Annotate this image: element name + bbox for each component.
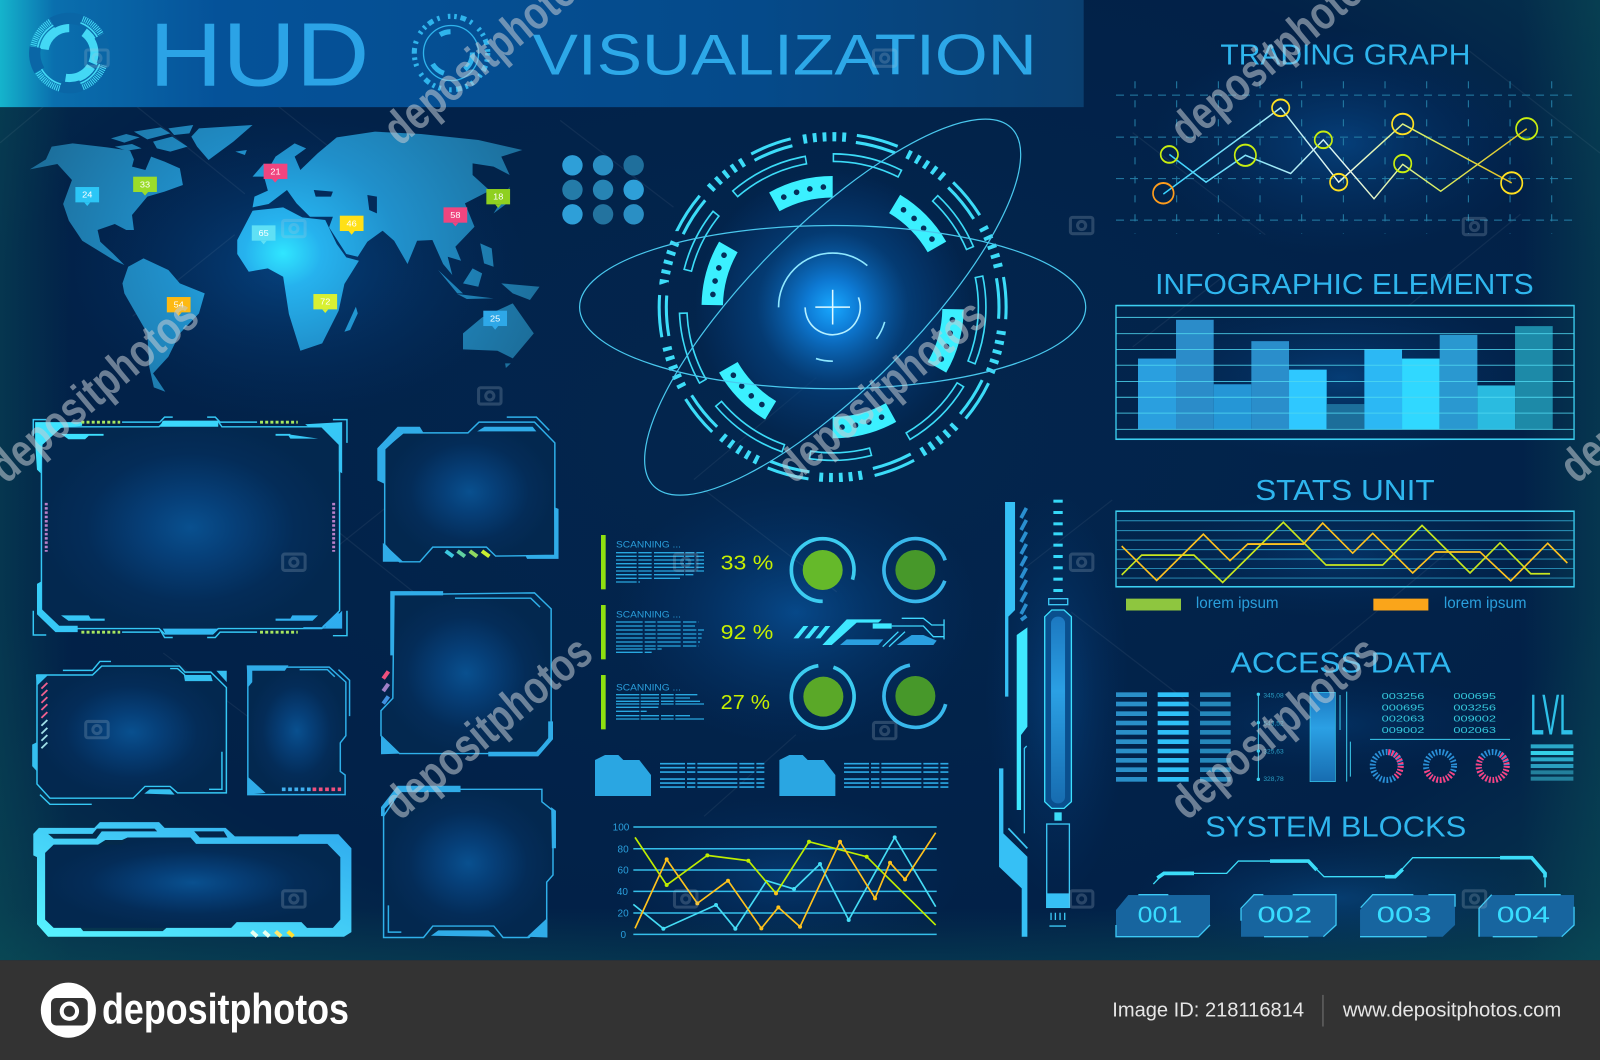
vertical scale: 328,78: [1263, 776, 1284, 783]
value: 33%: 33 %: [721, 552, 774, 574]
vertical scale: 325,63: [1263, 748, 1284, 755]
dial 1: [1371, 751, 1402, 781]
line chart: 100: [613, 823, 630, 834]
dial 2: [1421, 747, 1459, 785]
outer tick ring: [640, 115, 1025, 500]
marker: 21: [264, 164, 287, 183]
tech glyph: [793, 618, 944, 647]
orbit: horizontal: [580, 226, 1086, 389]
band interior: [657, 131, 1009, 483]
legend label 2: lorem ipsum: [1444, 595, 1527, 612]
scanning row 1: SCANNING ...: [616, 540, 681, 550]
central radar: [580, 70, 1086, 544]
legend swatch orange: [1373, 599, 1428, 610]
marker: 18: 18: [493, 192, 504, 202]
header band: [0, 0, 1084, 107]
level stripes: [1531, 744, 1573, 781]
line chart: 60: [618, 866, 629, 877]
line chart: 80: [618, 844, 629, 855]
system block 003: 003: [1377, 901, 1432, 927]
number table: 003256: [1453, 702, 1496, 712]
stats chart: [1116, 511, 1574, 587]
gauge 1: [791, 539, 854, 601]
folder 2: [779, 755, 948, 796]
watermarks: depositphotos: [1160, 625, 1389, 829]
heading: HUD: HUD: [149, 6, 369, 106]
heading: infographic elements: INFOGRAPHIC ELEMENTS: [1155, 269, 1534, 301]
line chart: [613, 823, 937, 941]
outer long bars: [601, 75, 1065, 539]
watermark diagonal lines: [0, 51, 1600, 816]
thick dotted arcs: [710, 185, 955, 430]
scanning row 3: [601, 675, 704, 729]
marker: 24: [75, 187, 99, 206]
scanning row 1: [601, 535, 704, 589]
heading: access data: ACCESS DATA: [1231, 647, 1451, 679]
frame: right middle: [381, 591, 553, 756]
frame: bottom right: [381, 786, 556, 938]
dot grid: [562, 155, 644, 224]
stripe columns: [1116, 692, 1231, 782]
value: 27%: 27 %: [721, 692, 770, 714]
marker: 25: [483, 311, 507, 330]
watermark cameras: [86, 50, 1486, 907]
world map: [30, 125, 540, 392]
bar chart: [1116, 306, 1574, 439]
centre arcs: [779, 253, 887, 361]
frames: [32, 417, 559, 938]
heading: stats unit: STATS UNIT: [1255, 475, 1435, 507]
scanning row 2: [601, 605, 704, 659]
marker: 65: 65: [259, 229, 269, 238]
marker: 21: 21: [270, 167, 281, 176]
line chart: 0: [620, 930, 626, 941]
frame: wide: [33, 822, 351, 937]
system block 002: 002: [1257, 901, 1312, 927]
marker: 25: 25: [490, 314, 500, 323]
marker: 72: [313, 294, 337, 313]
system block 001: [1116, 895, 1210, 937]
number table: [1382, 691, 1496, 735]
band segments: [655, 130, 1010, 484]
marker: 46: [340, 216, 364, 235]
system block 004: [1479, 895, 1574, 937]
vertical scale: 543,52: [1263, 720, 1284, 727]
frame: large: [33, 417, 347, 638]
marker: 54: 54: [174, 300, 184, 310]
footer divider: [1322, 995, 1323, 1027]
system block 001: 001: [1138, 901, 1182, 927]
trading graph: [1116, 81, 1575, 234]
folder 1: [595, 755, 764, 796]
icon: header ring left: [22, 6, 117, 100]
number table: 002063: [1382, 714, 1425, 724]
watermarks: [0, 0, 1600, 829]
number table: 000695: [1453, 691, 1496, 701]
marker: 65: [252, 225, 276, 244]
marker: 58: [443, 207, 467, 226]
middle column: [595, 500, 1071, 941]
marker: 33: [133, 177, 157, 196]
access data panel: [1116, 683, 1574, 937]
heading: trading graph: TRADING GRAPH: [1220, 39, 1470, 71]
marker: 54: [167, 297, 191, 316]
marker: 46: 46: [347, 219, 357, 228]
marker: 72: 72: [320, 297, 331, 307]
image id: Image ID: 218116814: [1112, 999, 1304, 1021]
system block 003: [1360, 895, 1455, 937]
icon: header ring right: [414, 16, 488, 90]
right charts: [1116, 81, 1575, 610]
number table: 009002: [1453, 714, 1496, 724]
footer bar: [0, 960, 1600, 1060]
marker: 58: 58: [450, 211, 461, 220]
website: www.depositphotos.com: [1342, 999, 1561, 1021]
system block 002: [1241, 895, 1336, 937]
scanning row 2: SCANNING ...: [616, 610, 681, 620]
number table: 002063: [1453, 725, 1496, 735]
scanning row 3: SCANNING ...: [616, 683, 681, 693]
gauge 2: [875, 530, 956, 610]
divider: [1370, 738, 1510, 741]
frame: mid left: [32, 661, 227, 804]
legend swatch green: [1126, 599, 1181, 610]
heading: VISUALIZATION: VISUALIZATION: [533, 23, 1037, 87]
dial 3: [1473, 747, 1512, 785]
line chart: 40: [617, 887, 628, 898]
gauge 3: [783, 657, 863, 737]
number table: 009002: [1382, 725, 1425, 735]
system block 004: 004: [1497, 901, 1550, 927]
orbit: diagonal: [596, 70, 1069, 544]
value: 92%: 92 %: [721, 622, 774, 644]
cross: [815, 290, 850, 324]
gauge 4: [877, 658, 954, 734]
heading: system blocks: SYSTEM BLOCKS: [1205, 812, 1466, 844]
connector: [1153, 858, 1545, 887]
marker: 33: 33: [140, 180, 150, 189]
number table: 000695: [1382, 702, 1425, 712]
number table: 003256: [1382, 691, 1425, 701]
vertical scale: 345,08: [1263, 692, 1284, 699]
marker: 24: 24: [82, 190, 93, 200]
watermarks: depositphotos: [373, 625, 602, 829]
legend label 1: lorem ipsum: [1196, 595, 1279, 612]
watermarks: depositphotos: [767, 289, 996, 492]
marker: 18: [486, 189, 510, 208]
frame: top right: [377, 417, 559, 562]
vertical gauge column: [999, 500, 1071, 937]
frame: small: [247, 665, 350, 795]
line chart: 20: [618, 909, 629, 920]
vertical scale: [1257, 692, 1350, 783]
logo wordmark: depositphotos: [102, 985, 349, 1033]
logo icon: [41, 983, 96, 1038]
